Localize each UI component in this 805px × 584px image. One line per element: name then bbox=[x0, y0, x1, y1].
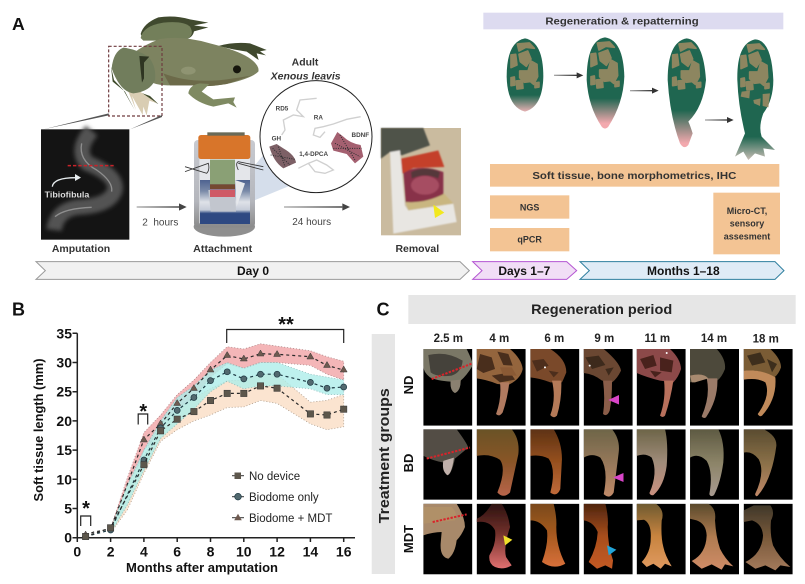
arrow: 24 hours bbox=[284, 203, 350, 228]
y-axis ticks: 10 bbox=[56, 471, 72, 487]
x-axis ticks: 2 bbox=[107, 544, 115, 560]
photo grid: row MDT bbox=[423, 504, 793, 574]
x-axis ticks: 4 bbox=[140, 544, 148, 560]
x-axis ticks bbox=[73, 544, 352, 560]
column headers: 14 m bbox=[701, 333, 727, 345]
panel letter B: B bbox=[12, 300, 25, 320]
arrow: 2 hours: 2 hours bbox=[142, 217, 178, 228]
header: regeneration period bbox=[408, 295, 796, 324]
y-axis title: Soft tissue length (mm) bbox=[32, 358, 46, 502]
suture lines bbox=[185, 162, 263, 173]
assay box: NGS: NGS bbox=[520, 202, 539, 212]
arrow: 24 hours: 24 hours bbox=[292, 217, 331, 228]
molecule: RA bbox=[313, 117, 361, 137]
label: Amputation: Amputation bbox=[52, 244, 110, 255]
x-axis ticks: 8 bbox=[207, 544, 215, 560]
molecule: 1,4-DPCA bbox=[298, 160, 333, 173]
icon: magenta arrowhead BD bbox=[613, 473, 624, 482]
zoom connector lines bbox=[43, 113, 162, 129]
timeline: Days 1-7: Days 1–7 bbox=[498, 264, 551, 278]
callout circle: factors: 1,4-DPCA bbox=[299, 151, 329, 158]
band: Biodome only bbox=[111, 362, 344, 533]
y-axis ticks: 30 bbox=[56, 354, 72, 370]
significance bracket: month 0.5: * bbox=[82, 498, 90, 520]
assay box: NGS bbox=[490, 195, 569, 219]
x-axis ticks: 6 bbox=[173, 544, 181, 560]
legend: No device bbox=[249, 471, 300, 483]
callout circle: factors: RD5 bbox=[276, 105, 289, 112]
assay box: micro-CT: sensory bbox=[730, 219, 764, 229]
panel: A bbox=[12, 13, 784, 279]
x-axis ticks: 16 bbox=[336, 544, 352, 560]
species label: Adult bbox=[292, 58, 319, 69]
y-axis ticks: 5 bbox=[64, 500, 72, 516]
row labels: MDT bbox=[401, 525, 416, 553]
species label bbox=[270, 58, 341, 83]
limb stage 3 bbox=[668, 38, 706, 147]
arrow: 2 hours bbox=[137, 203, 187, 228]
label: Removal: Removal bbox=[395, 244, 439, 255]
row labels bbox=[401, 376, 416, 553]
column headers bbox=[434, 333, 779, 346]
band: Biodome + MDT bbox=[111, 344, 344, 532]
timeline: Months 1-18: Months 1–18 bbox=[647, 264, 720, 278]
side label: treatment groups: Treatment groups bbox=[377, 388, 393, 523]
y-axis ticks bbox=[56, 325, 72, 546]
x-axis ticks: 14 bbox=[303, 544, 318, 560]
header: regeneration and repatterning bbox=[483, 13, 783, 29]
limb stage 2 bbox=[587, 37, 624, 129]
column headers: 18 m bbox=[753, 334, 779, 346]
header: regeneration and repatterning: Regeneration & repatterning bbox=[545, 17, 699, 28]
side label: treatment groups bbox=[372, 334, 395, 574]
limb stage 4 bbox=[735, 39, 775, 160]
assay box: micro-CT bbox=[713, 193, 780, 254]
assay box: micro-CT: assesment bbox=[724, 231, 770, 241]
icon: frog bbox=[111, 17, 267, 115]
column headers: 6 m bbox=[544, 333, 564, 345]
species label: Xenous leavis bbox=[270, 72, 341, 83]
label: Attachment: Attachment bbox=[193, 244, 253, 255]
assay box: qPCR bbox=[490, 228, 569, 251]
legend bbox=[232, 471, 332, 525]
panel letter A: A bbox=[12, 14, 25, 34]
x-axis ticks: 0 bbox=[73, 544, 81, 560]
photo: removal bbox=[381, 128, 461, 235]
arrow 1 bbox=[554, 72, 583, 78]
protein: GH: GH bbox=[272, 136, 282, 143]
series: Biodome + MDT bbox=[82, 350, 347, 537]
y-axis ticks: 25 bbox=[56, 384, 72, 400]
molecule: RD5 bbox=[282, 98, 317, 135]
x-ray image: amputation bbox=[41, 129, 129, 240]
assay box: soft tissue bbox=[490, 164, 779, 187]
row labels: ND bbox=[401, 376, 416, 394]
panel: regeneration timeline bbox=[473, 13, 784, 279]
axes bbox=[72, 333, 355, 542]
assay box: micro-CT: Micro-CT, bbox=[727, 206, 767, 216]
dashed crop box bbox=[109, 46, 162, 116]
significance bracket: months 9-16 bbox=[227, 314, 344, 343]
device illustration: attachment bbox=[194, 132, 255, 237]
significance bracket: month 0.5 bbox=[81, 498, 91, 526]
callout circle: factors: RA bbox=[314, 115, 323, 122]
column headers: 9 m bbox=[594, 333, 614, 345]
icon: magenta arrowhead ND bbox=[608, 395, 619, 404]
legend: Biodome + MDT bbox=[249, 513, 332, 525]
column headers: 11 m bbox=[645, 333, 670, 345]
y-axis ticks: 0 bbox=[64, 530, 72, 546]
panel letter C: C bbox=[376, 300, 390, 320]
timeline: Day 0 bbox=[36, 262, 469, 279]
legend: Biodome only bbox=[249, 492, 319, 504]
arrow 3 bbox=[705, 117, 734, 123]
timeline: Day 0: Day 0 bbox=[237, 264, 269, 278]
photo grid: row ND bbox=[423, 349, 793, 426]
header: regeneration period: Regeneration period bbox=[531, 301, 672, 317]
column headers: 4 m bbox=[489, 333, 509, 345]
y-axis ticks: 35 bbox=[56, 325, 72, 341]
significance bracket: month 4: * bbox=[139, 401, 147, 423]
x-axis ticks: 10 bbox=[236, 544, 252, 560]
callout circle: factors bbox=[260, 81, 372, 193]
series: Biodome only bbox=[86, 369, 347, 536]
y-axis ticks: 20 bbox=[56, 413, 72, 429]
series: No device bbox=[82, 383, 347, 540]
timeline: Days 1-7 bbox=[473, 262, 577, 279]
column headers: 2.5 m bbox=[434, 333, 463, 345]
assay box: qPCR: qPCR bbox=[517, 235, 542, 245]
protein: BDNF: BDNF bbox=[352, 132, 369, 139]
timeline: Months 1-18 bbox=[580, 262, 784, 279]
x-axis title: Months after amputation bbox=[126, 561, 278, 575]
assay box: soft tissue: Soft tissue, bone morphometrics, IHC bbox=[532, 171, 736, 182]
limb stage 1 bbox=[507, 38, 543, 112]
line chart: soft tissue length bbox=[32, 314, 355, 575]
y-axis ticks: 15 bbox=[56, 442, 72, 458]
significance bracket: months 9-16: ** bbox=[278, 314, 294, 336]
row labels: BD bbox=[401, 454, 416, 472]
photo grid: row BD bbox=[423, 429, 793, 500]
band: No device bbox=[111, 374, 344, 533]
arrow 2 bbox=[630, 88, 659, 94]
x-ray image: amputation: Tibiofibula bbox=[45, 190, 90, 199]
x-axis ticks: 12 bbox=[269, 544, 285, 560]
callout cone bbox=[235, 155, 292, 208]
